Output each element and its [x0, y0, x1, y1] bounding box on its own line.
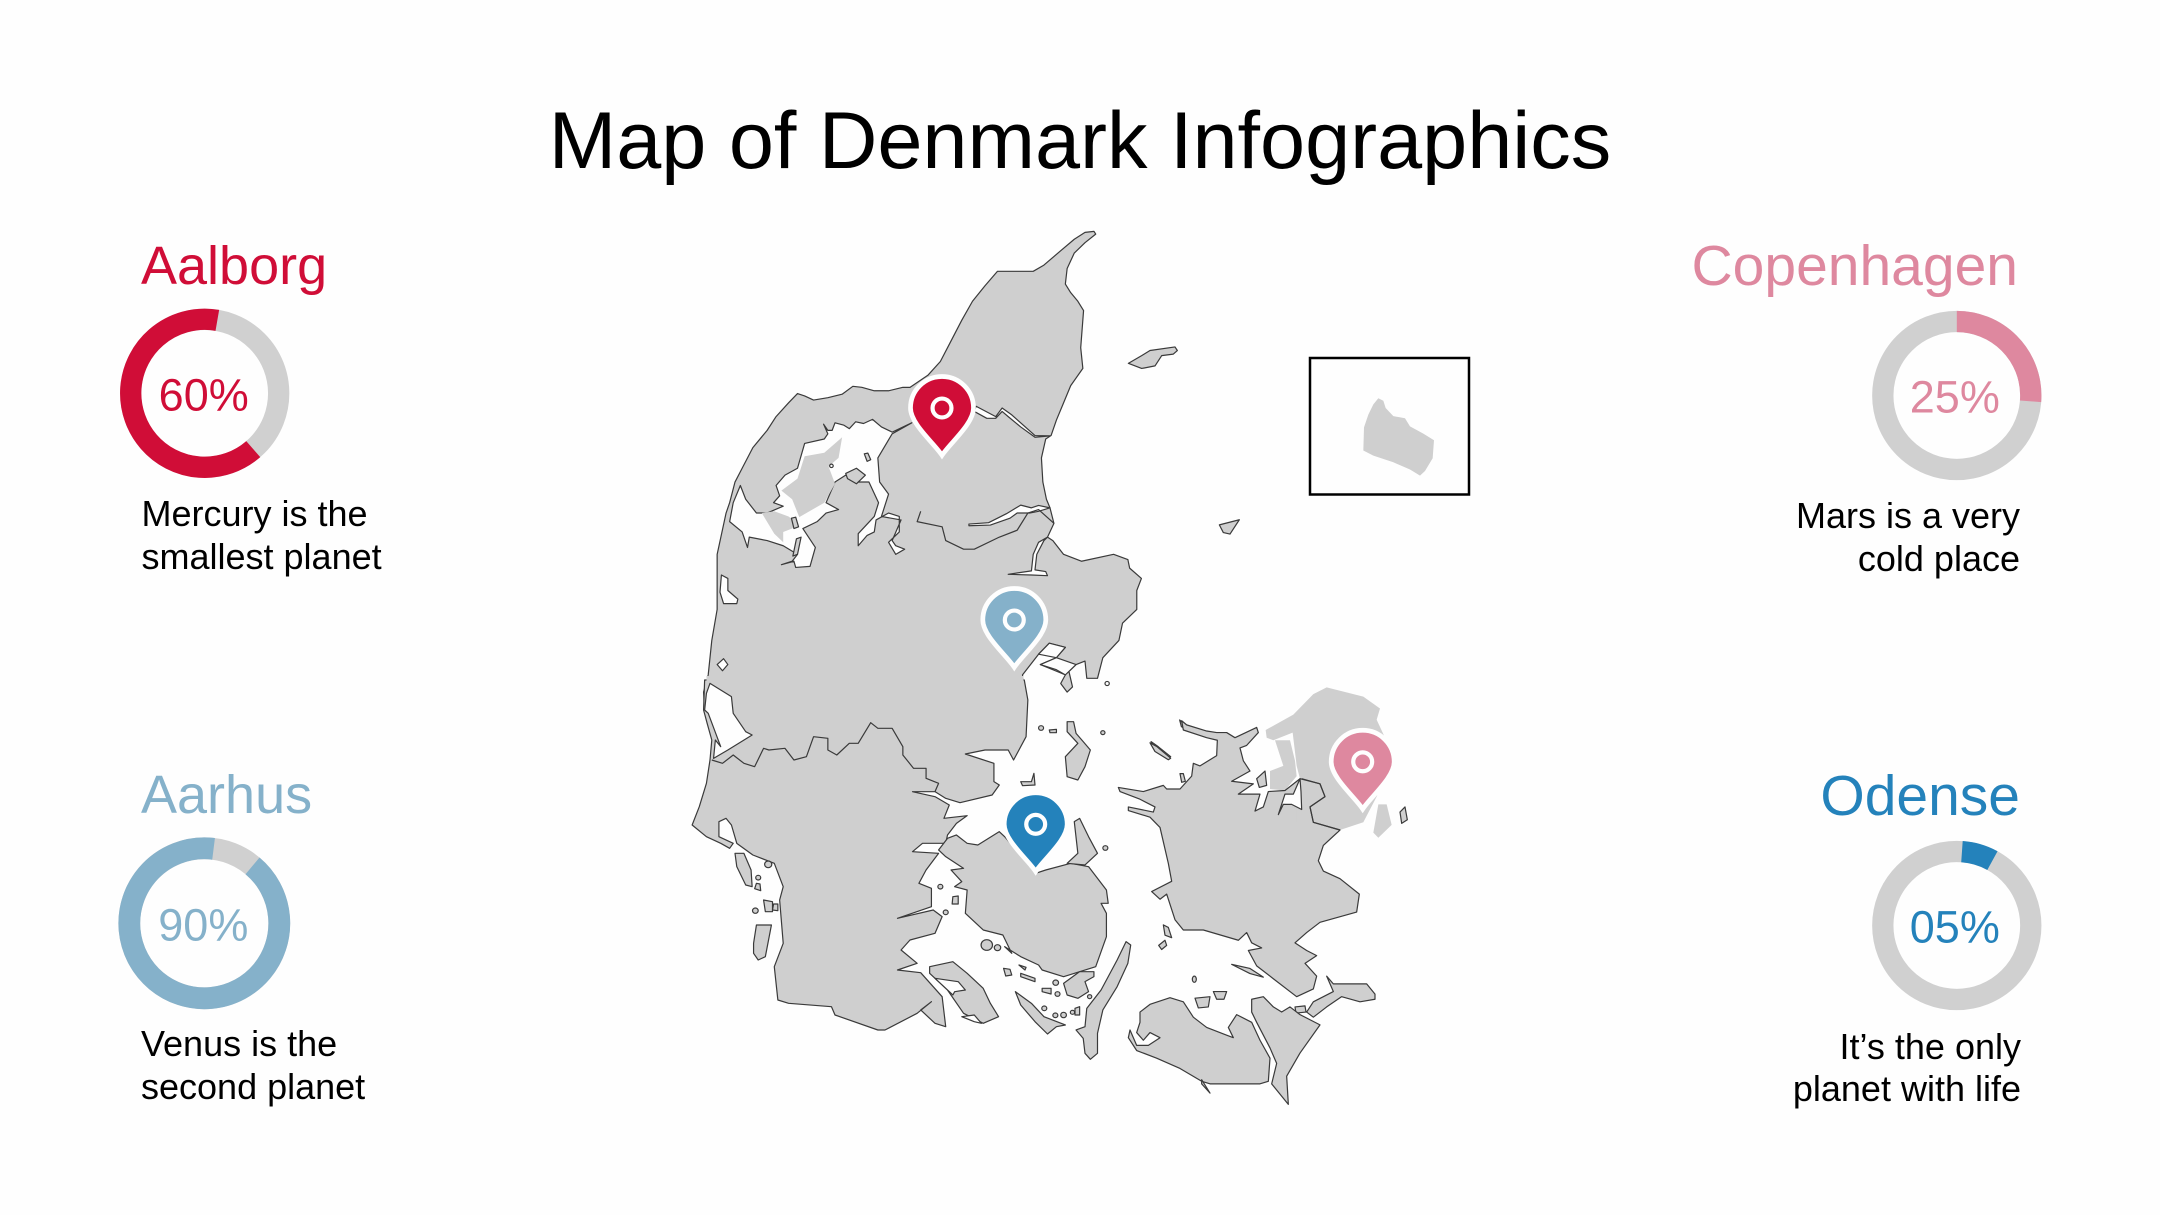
donut: Aarhus 90%: 90%	[158, 899, 248, 950]
heading: Odense: Odense	[1820, 764, 2020, 828]
map: Zealand islands	[1150, 743, 1407, 1017]
map: Lolland	[1128, 998, 1270, 1084]
donut: Odense 05%: 05%	[1910, 902, 2000, 952]
heading: Aarhus: Aarhus	[141, 765, 312, 825]
text: Aalborg description: smallest planet	[142, 536, 382, 577]
panel: Copenhagen	[1692, 234, 2031, 579]
heading: Copenhagen: Copenhagen	[1692, 234, 2018, 298]
map: south Jutland waters and islands	[705, 683, 1220, 1059]
map: Falster	[1252, 997, 1320, 1104]
donut: Copenhagen 25%: 25%	[1910, 372, 2000, 422]
map: Zealand	[1118, 347, 1407, 1104]
inset box: Bornholm	[1310, 358, 1469, 494]
text: Copenhagen description: Mars is a very	[1796, 495, 2020, 536]
map: Funen	[939, 832, 1108, 977]
map: Laeso	[1128, 347, 1177, 368]
donut: Odense 05%	[1878, 847, 2036, 1004]
pin: Copenhagen	[1331, 730, 1394, 809]
text: Aarhus description: second planet	[141, 1066, 365, 1107]
panel: Odense	[1793, 764, 2036, 1109]
map: Limfjord and north Jutland waters	[717, 406, 1109, 686]
map: Funen islands	[930, 720, 1220, 1059]
text: Odense description: planet with life	[1793, 1068, 2021, 1109]
pin: Odense	[1004, 793, 1067, 872]
text: Aalborg description: Mercury is the	[142, 493, 368, 534]
donut: Aarhus 90%	[99, 818, 310, 1029]
map: north Jutland	[704, 231, 1141, 713]
panel: Aarhus	[99, 765, 365, 1107]
heading: Aalborg: Aalborg	[141, 236, 327, 296]
map: west coast islands	[735, 853, 778, 960]
text: Odense description: It’s the only	[1840, 1026, 2021, 1067]
donut: Copenhagen 25%	[1883, 322, 2031, 470]
map: south Jutland	[692, 680, 1028, 1030]
text: Copenhagen description: cold place	[1858, 538, 2020, 579]
map of Denmark	[692, 231, 1407, 1104]
donut: Aalborg 60%: 60%	[159, 369, 249, 420]
title: Map of Denmark Infographics	[549, 96, 1611, 186]
pin: Aalborg	[910, 376, 974, 455]
donut: Aalborg 60%	[100, 289, 309, 498]
text: Aarhus description: Venus is the	[141, 1023, 337, 1064]
map: Anholt	[1219, 520, 1239, 534]
panel: Aalborg	[100, 236, 382, 577]
pin: Aarhus	[983, 588, 1046, 667]
